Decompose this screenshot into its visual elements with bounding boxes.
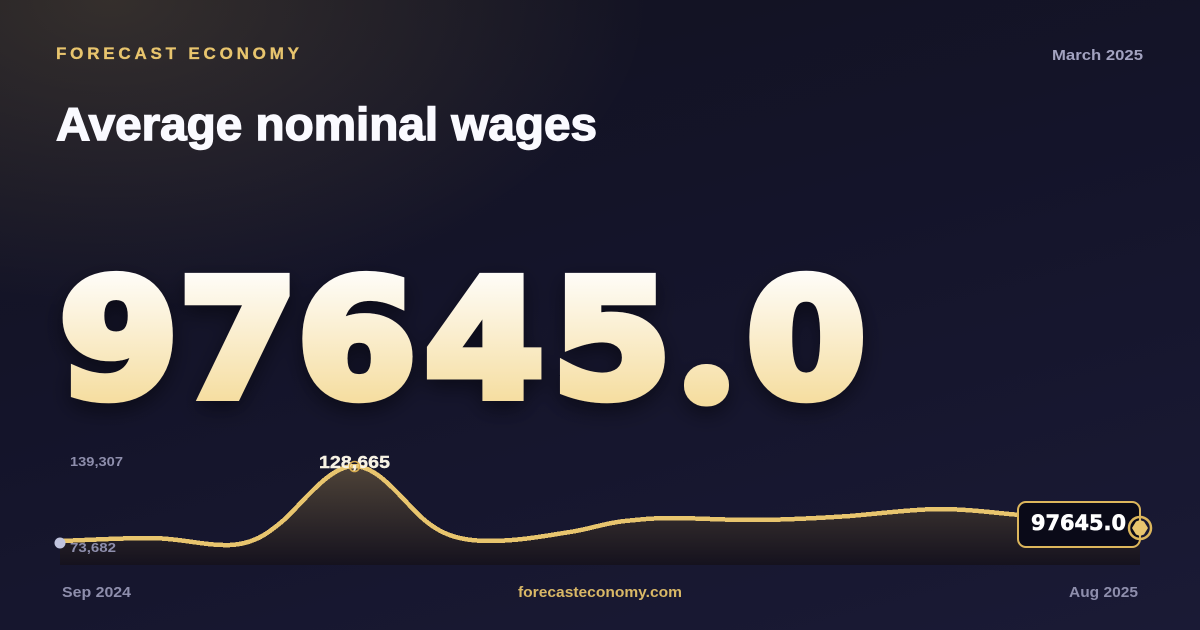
headline value: 5 — [552, 247, 672, 435]
headline value: . — [705, 378, 708, 388]
headline value: 0 — [746, 247, 866, 435]
area under curve — [60, 466, 1140, 565]
end value badge: 97645.0 — [1031, 511, 1126, 535]
website: forecasteconomy.com — [518, 585, 682, 601]
end point marker — [1129, 517, 1151, 539]
title: Average nominal wages — [56, 98, 597, 150]
headline value: 4 — [425, 247, 544, 435]
sparkline chart — [54, 452, 1151, 565]
start date: Sep 2024 — [62, 585, 131, 601]
axis max label: 139,307 — [70, 454, 123, 469]
brand label: FORECAST ECONOMY — [56, 44, 300, 63]
headline value: 7 — [179, 247, 298, 435]
axis min label: 73,682 — [70, 540, 116, 555]
peak marker — [350, 462, 360, 472]
end value badge — [1018, 502, 1140, 547]
headline value: 9 — [59, 247, 179, 435]
start point — [54, 538, 66, 548]
peak label: 128,665 — [319, 452, 390, 472]
headline value: 6 — [297, 247, 417, 435]
date: March 2025 — [1052, 47, 1143, 64]
end date: Aug 2025 — [1069, 585, 1138, 601]
line — [60, 466, 1020, 545]
